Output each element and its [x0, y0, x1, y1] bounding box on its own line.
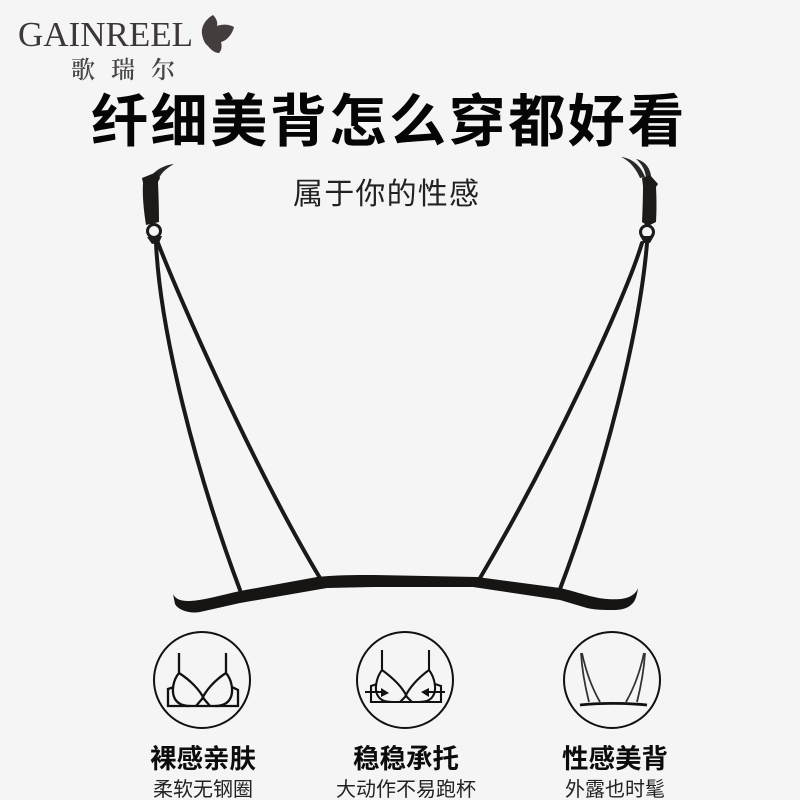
- lower band: [173, 575, 638, 613]
- brand chinese name: 歌瑞尔: [71, 50, 191, 85]
- left strap adjuster: [142, 164, 174, 244]
- brand logo: [18, 15, 234, 85]
- feature: nude feel: [150, 632, 256, 800]
- feature heading: 裸感亲肤: [150, 744, 256, 774]
- bra back strap illustration: [142, 157, 658, 613]
- straps: [156, 243, 647, 590]
- feature: stable support: [336, 632, 476, 800]
- title: 纤细美背怎么穿都好看: [91, 90, 687, 154]
- feature heading: 稳稳承托: [353, 744, 459, 774]
- feature: sexy back: [562, 632, 668, 800]
- icon: inward arrows: [381, 688, 429, 697]
- icon: bra with support arrows: [357, 632, 453, 728]
- feature heading: 性感美背: [562, 744, 668, 774]
- subtitle: 属于你的性感: [293, 178, 480, 211]
- right strap adjuster: [621, 157, 658, 243]
- brand wordmark: GAINREEL: [18, 15, 193, 54]
- icon: back straps in circle: [564, 632, 660, 728]
- icon: bra in circle: [154, 632, 250, 728]
- icon: petal logo mark: [202, 15, 234, 53]
